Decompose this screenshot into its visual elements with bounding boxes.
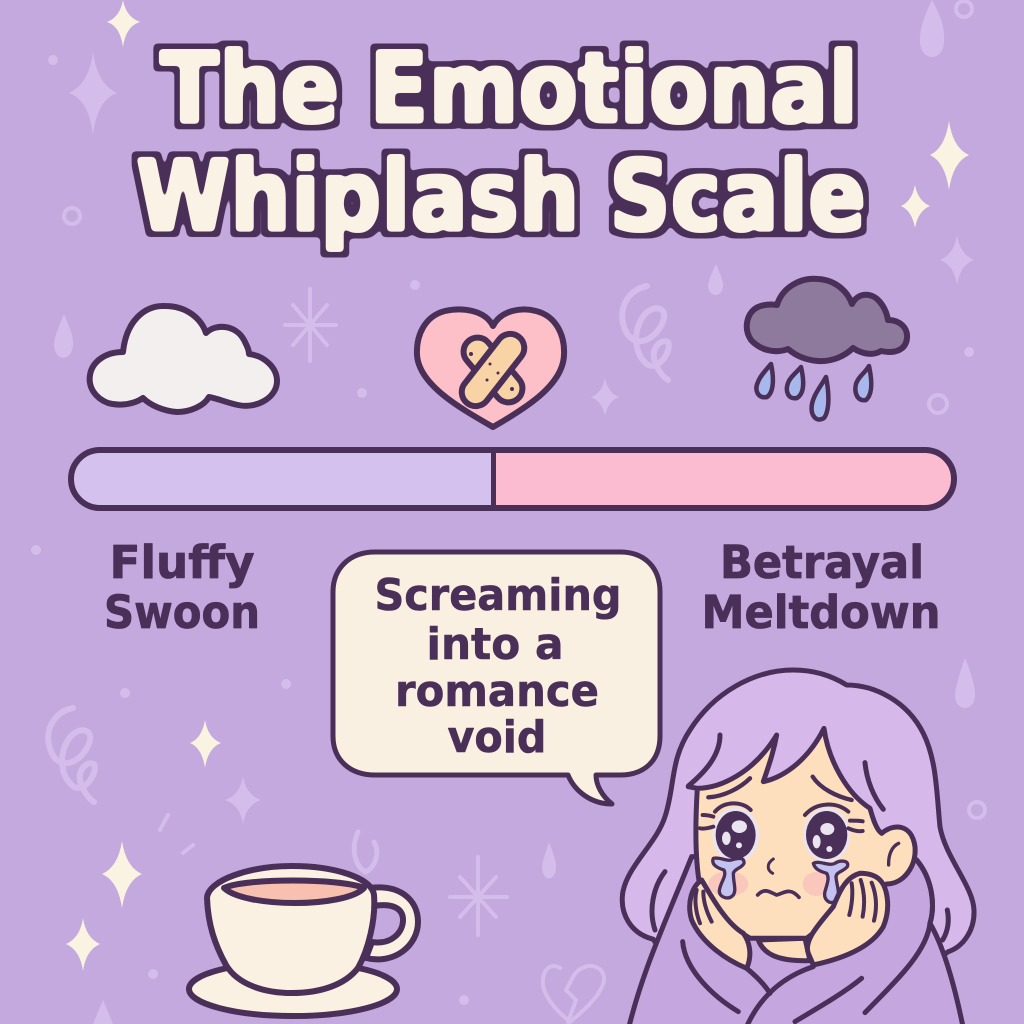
neck [758,938,810,961]
saucer [189,962,397,1016]
title: Whiplash Scale [136,140,866,254]
bubble text: void [448,712,546,763]
character: crying girl [622,670,974,1024]
nose [768,859,773,873]
blanket [627,857,965,1024]
mouth [758,891,799,897]
bandage [456,328,530,412]
hair back [622,670,974,993]
bubble text [374,570,622,763]
handle [366,887,418,959]
blanket folds [683,860,932,1024]
label: Fluffy Swoon [104,536,260,639]
label: Betrayal Meltdown: Meltdown [702,586,940,639]
bubble text: romance [395,666,599,717]
blush [708,871,831,897]
bubble text: Screaming [374,570,622,621]
icon: storm cloud with rain [747,279,907,420]
speech bubble [333,552,660,804]
cup body [207,866,374,993]
inner ear [889,843,899,865]
bubble text: into a [426,619,564,670]
label: Betrayal Meltdown [702,536,940,639]
right eye [803,805,863,862]
left hand [690,880,750,968]
title [136,32,866,254]
hair strands [652,735,948,940]
icon: tea cup [189,866,418,1016]
icon: white cloud [90,306,277,412]
eyebrows [708,777,852,800]
icon: bandaged heart [417,309,564,427]
label: Fluffy Swoon: Fluffy [110,536,254,589]
tears [713,858,848,903]
left segment [72,451,493,507]
label: Fluffy Swoon: Swoon [104,586,260,639]
scale bar [71,450,954,508]
title: The Emotional [160,32,858,146]
right hand [807,873,888,965]
label: Betrayal Meltdown: Betrayal [720,536,924,589]
face and ear [688,728,915,938]
tea surface [224,880,364,903]
right segment [493,451,953,507]
rain drops [756,364,871,420]
left eye [700,803,759,862]
fingers [695,880,876,923]
